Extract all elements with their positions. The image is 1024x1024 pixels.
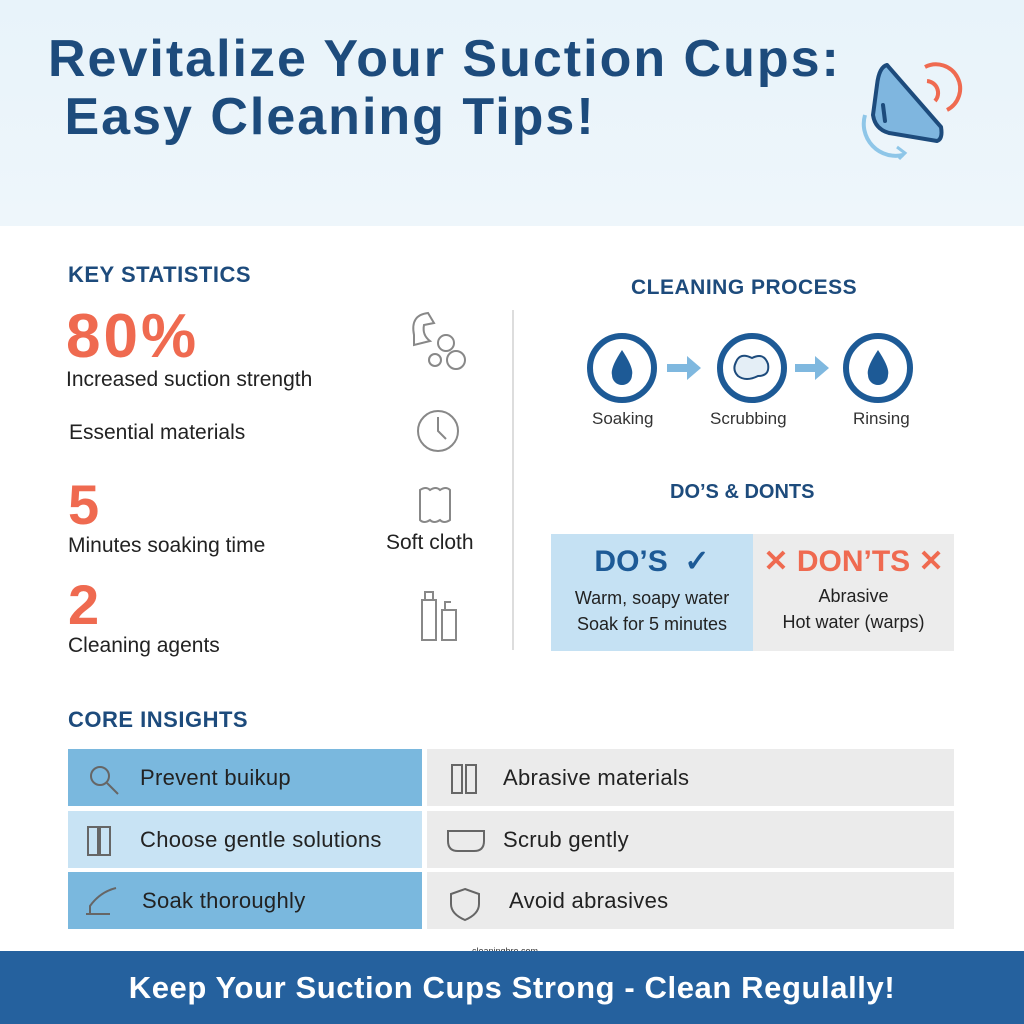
process diagram: Scrubbing [710, 409, 787, 428]
footer banner: Keep Your Suction Cups Strong - Clean Regulally! [129, 970, 895, 1005]
process diagram: Soaking [592, 409, 653, 428]
icon: suction cup [862, 62, 962, 160]
stat 2 [68, 573, 220, 657]
stat 80%: Increased suction strength [66, 368, 312, 391]
insights grid: Avoid abrasives [509, 888, 668, 912]
panel: do's: DO’S ✓ [594, 545, 710, 578]
title: Revitalize Your Suction Cups: [48, 30, 841, 88]
insights grid: Soak thoroughly [142, 888, 306, 912]
insights grid [68, 749, 954, 929]
insights grid: Choose gentle solutions [140, 826, 382, 852]
panel: do's [551, 534, 753, 651]
stat 80%: 80% [66, 302, 199, 371]
panel: don'ts: ✕ DON’TS ✕ [763, 545, 944, 578]
divider [512, 310, 514, 650]
insights grid: Scrub gently [503, 826, 629, 852]
heading: cleaning process: CLEANING PROCESS [631, 276, 857, 299]
stat 5: 5 [68, 473, 99, 536]
stat 2: Cleaning agents [68, 634, 220, 657]
stat 5 [68, 473, 265, 557]
panel: don'ts [753, 534, 954, 651]
heading: core insights: CORE INSIGHTS [68, 707, 248, 732]
label soft cloth: Soft cloth [386, 531, 474, 554]
title [48, 30, 841, 146]
heading: do's and donts: DO’S & DONTS [670, 481, 814, 503]
stat 5: Minutes soaking time [68, 534, 265, 557]
watermark: cleaningbro.com [472, 946, 538, 956]
stat 80% [66, 302, 312, 391]
footer banner [0, 951, 1024, 1024]
panel: do's: Soak for 5 minutes [577, 614, 727, 634]
icons column [412, 312, 466, 641]
stat essential materials: Essential materials [69, 421, 245, 444]
panel: don'ts: Hot water (warps) [782, 612, 925, 632]
panel: do's: Warm, soapy water [575, 588, 729, 608]
insights grid: Prevent buikup [140, 764, 291, 790]
process diagram [587, 333, 913, 428]
header background [0, 0, 1024, 226]
heading: key statistics: KEY STATISTICS [68, 262, 251, 287]
title: Easy Cleaning Tips! [64, 88, 596, 146]
insights grid: Abrasive materials [503, 764, 689, 790]
process diagram: Rinsing [853, 409, 910, 428]
panel: don'ts: Abrasive [818, 586, 889, 606]
stat 2: 2 [68, 573, 99, 636]
